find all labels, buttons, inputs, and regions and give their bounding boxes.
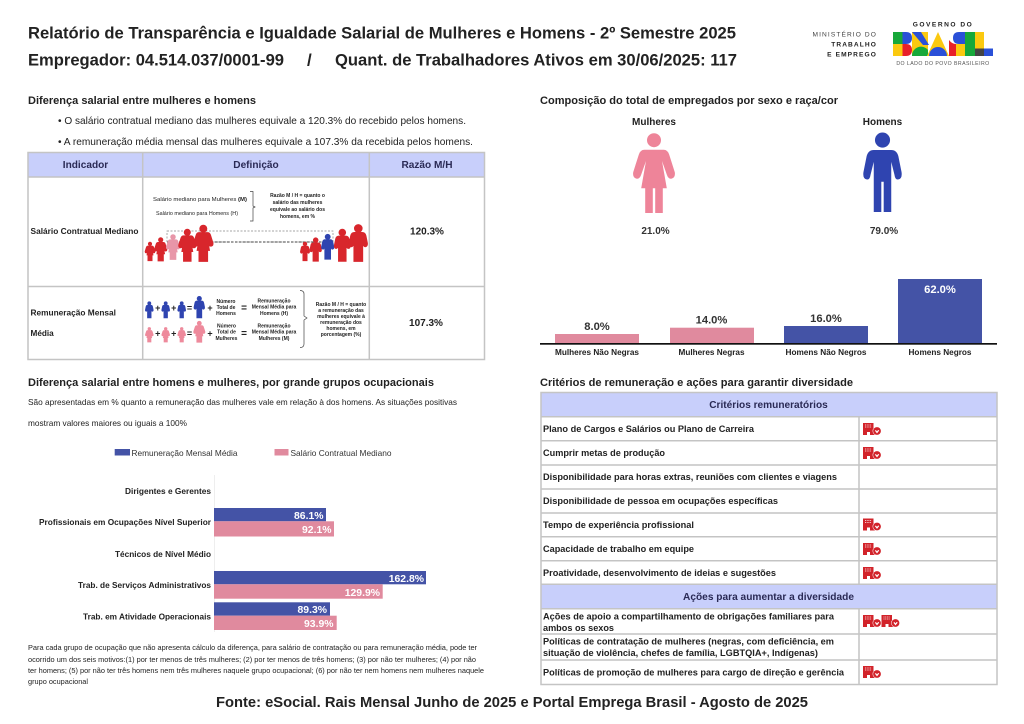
title line 2: separator: /	[307, 50, 312, 70]
diagram: mean remuneration definition: porcentagem (%)	[321, 332, 362, 338]
bar: Mulheres Não Negras	[555, 334, 639, 344]
diagram: mean remuneration definition: Remuneração	[257, 324, 291, 330]
action: promotion policies: Políticas de promoção de mulheres para cargo de direção e gerência	[543, 668, 845, 678]
diagram: mean remuneration definition: =	[241, 303, 247, 314]
diagram: mean remuneration definition: Homens (H)	[260, 311, 288, 317]
icon: company marker, experience	[863, 518, 881, 531]
criterion: overtime availability: Disponibilidade para horas extras, reuniões com clientes e viagens	[543, 472, 837, 482]
section header: Ações para aumentar a diversidade: Ações para aumentar a diversidade	[683, 592, 854, 603]
table: indicators	[28, 152, 484, 360]
bar chart: sex and race	[540, 279, 997, 357]
criterion: production goals: Cumprir metas de produção	[543, 448, 665, 458]
action: hiring policies	[543, 636, 834, 658]
value: 8.0%: 8.0%	[584, 321, 610, 333]
intro text: mostram valores maiores ou iguais a 100%	[28, 419, 187, 428]
category: Profissionais: Profissionais em Ocupações Nível Superior	[39, 517, 212, 527]
axis label: Homens Negros: Homens Negros	[908, 348, 972, 357]
icon: man	[863, 132, 902, 212]
panel: remuneration criteria and diversity actions	[540, 377, 997, 684]
diagram: mean remuneration definition: homens, em	[326, 326, 356, 332]
diagram: mean remuneration definition	[145, 290, 366, 348]
title: report heading	[28, 24, 737, 70]
diagram: mean remuneration definition: +	[207, 303, 213, 313]
icon: company marker, proactivity	[863, 567, 881, 579]
bars: Serviços Administrativos: 162.8%	[389, 574, 424, 585]
diagram: mean remuneration definition: Total de	[217, 305, 236, 311]
bar: Mulheres Negras	[670, 328, 754, 344]
logo: Governo do Brasil: GOVERNO DO	[913, 22, 973, 28]
diagram: median salary definition: equivale ao salário dos	[270, 207, 325, 213]
axis label: Mulheres Não Negras: Mulheres Não Negras	[555, 348, 639, 357]
diagram: mean remuneration definition: Razão M / H = quanto	[316, 302, 366, 308]
icon: company marker, shared duties 1	[863, 615, 881, 627]
footnote: Para cada grupo de ocupação que não apresenta cálculo da diferença, para salário de contratação ou para remuneração média, pode ter	[28, 643, 478, 652]
value: 14.0%: 14.0%	[696, 314, 727, 326]
column header: Razão M/H: Razão M/H	[401, 160, 453, 171]
criterion: experience: Tempo de experiência profissional	[543, 520, 694, 530]
action: shared family duties: Ações de apoio a compartilhamento de obrigações familiares para	[543, 612, 835, 622]
label: Mulheres: Mulheres	[632, 117, 676, 128]
legend: Salário Contratual Mediano	[290, 448, 392, 458]
diagram: mean remuneration definition: remuneração dos	[320, 320, 362, 326]
icon: company marker, promotion policies	[863, 666, 881, 678]
diagram: mean remuneration definition: Número	[217, 299, 235, 305]
title line 1: Relatório de Transparência e Igualdade Salarial de Mulheres e Homens - 2º Semestre 2025	[28, 24, 736, 42]
bullet: monthly remuneration: • A remuneração média mensal das mulheres equivale a 107.3% da recebida pelos homens.	[58, 137, 473, 148]
category: Técnicos: Técnicos de Nível Médio	[115, 549, 211, 559]
value: 62.0%: 62.0%	[924, 284, 956, 296]
footnote	[28, 643, 484, 686]
diagram: median salary definition: Razão M / H = quanto o	[270, 193, 325, 199]
diagram: mean remuneration definition: =	[241, 328, 247, 340]
bars: Profissionais: 86.1%	[294, 511, 324, 522]
icon: woman	[633, 133, 675, 213]
panel: workforce composition by sex and race	[540, 95, 997, 357]
diagram: mean remuneration definition: a remuneração das	[318, 308, 364, 314]
logo: Governo do Brasil	[893, 22, 993, 67]
diagram: mean remuneration definition: +	[207, 328, 213, 338]
bars: Atividade Operacionais: 93.9%	[304, 619, 334, 630]
icon: company marker, shared duties 2	[882, 615, 900, 627]
diagram: mean remuneration definition: Mulheres	[216, 336, 238, 342]
logo: Governo do Brasil: DO LADO DO POVO BRASILEIRO	[896, 61, 990, 67]
diagram: mean remuneration definition: =	[187, 303, 192, 313]
diagram: mean remuneration definition: +	[171, 328, 176, 338]
diagram: median salary definition: homens, em %	[280, 214, 316, 220]
logo: Ministério do Trabalho e Emprego: E EMPREGO	[827, 52, 877, 58]
value: women 21.0%: 21.0%	[641, 226, 670, 237]
diagram: median salary definition: Salário mediano para Mulheres (M)	[153, 197, 247, 203]
section header: Critérios remuneratórios: Critérios remuneratórios	[709, 400, 828, 411]
criterion: proactivity: Proatividade, desenvolvimento de ideias e sugestões	[543, 568, 776, 578]
title line 2: active workers: Quant. de Trabalhadores Ativos em 30/06/2025: 117	[335, 50, 737, 70]
value: 120.3%: 120.3%	[410, 226, 444, 238]
bar chart: occupational groups	[39, 475, 426, 632]
heading: Diferença salarial entre homens e mulheres, por grande grupos ocupacionais	[28, 377, 434, 389]
bar: Homens Negros	[898, 279, 982, 344]
action: shared family duties	[543, 612, 835, 633]
criterion: career plan: Plano de Cargos e Salários ou Plano de Carreira	[543, 424, 755, 434]
diagram: mean remuneration definition: Número	[217, 324, 236, 330]
footnote: grupo ocupacional	[28, 677, 88, 686]
logo: Ministério do Trabalho e Emprego: MINISTÉRIO DO	[812, 30, 877, 38]
column header: Indicador: Indicador	[63, 160, 108, 171]
heading: Composição do total de empregados por sexo e raça/cor	[540, 95, 839, 107]
legend: Remuneração Mensal Média	[132, 448, 238, 458]
icon: company marker, production goals	[863, 447, 881, 459]
diagram: mean remuneration definition: +	[155, 303, 160, 313]
category: Dirigentes e Gerentes: Dirigentes e Gerentes	[125, 486, 211, 496]
axis label: Mulheres Negras: Mulheres Negras	[678, 348, 745, 357]
intro text	[28, 398, 457, 428]
bars: Serviços Administrativos	[214, 571, 426, 599]
footnote: ocorrido um dos seis motivos:(1) por ter menos de três mulheres; (2) por ter menos de três homens; (3) por não ter mulheres; (4) por não	[28, 655, 476, 664]
action: hiring policies: Políticas de contratação de mulheres (negras, com deficiência, em	[543, 636, 834, 646]
value: men 79.0%: 79.0%	[870, 226, 898, 237]
title line 2: employer: Empregador: 04.514.037/0001-99	[28, 50, 284, 70]
criterion: specific occupations availability: Disponibilidade de pessoa em ocupações específicas	[543, 496, 778, 506]
diagram: mean remuneration definition: =	[187, 328, 192, 338]
panel: salary difference between women and men	[28, 95, 484, 360]
diagram: median salary definition	[145, 192, 367, 261]
axis label: Homens Não Negros: Homens Não Negros	[786, 348, 867, 357]
diagram: mean remuneration definition: Total de	[217, 330, 236, 336]
icon: company marker, teamwork	[863, 543, 881, 555]
diagram: mean remuneration definition: Homens	[216, 311, 236, 317]
panel: salary difference by occupational group	[28, 377, 484, 686]
bar: Homens Não Negros	[784, 326, 868, 344]
diagram: mean remuneration definition: +	[155, 328, 160, 338]
source footer: Fonte: eSocial. Rais Mensal Junho de 2025 e Portal Emprega Brasil - Agosto de 2025	[216, 694, 808, 711]
bars: Atividade Operacionais	[214, 602, 337, 630]
footnote: ter homens; (5) por não ter três homens nem três mulheres naquele grupo ocupacional; (6) por não ter nem homens nem mulheres naquele	[28, 666, 484, 675]
diagram: mean remuneration definition: mulheres equivale à	[317, 314, 365, 320]
heading: Diferença salarial entre mulheres e homens	[28, 95, 256, 107]
diagram: median salary definition: salário das mulheres	[273, 200, 323, 206]
diagram: mean remuneration definition: Mensal Média para	[252, 330, 296, 336]
diagram: mean remuneration definition: Mulheres (M)	[259, 336, 290, 342]
diagram: median salary definition: Salário mediano para Homens (H)	[156, 211, 238, 217]
bars: Atividade Operacionais: 89.3%	[298, 605, 327, 616]
diagram: mean remuneration definition: +	[171, 303, 176, 313]
legend	[115, 448, 392, 458]
heading: Critérios de remuneração e ações para garantir diversidade	[540, 377, 853, 389]
label: Homens: Homens	[863, 117, 903, 128]
category: Atividade Operacionais: Trab. em Atividade Operacionais	[83, 612, 211, 622]
diagram: mean remuneration definition: Mensal Média para	[252, 304, 296, 310]
category: Serviços Administrativos: Trab. de Serviços Administrativos	[78, 580, 211, 590]
row label: Salário Contratual Mediano: Salário Contratual Mediano	[30, 227, 139, 236]
logo: Ministério do Trabalho e Emprego	[812, 30, 877, 58]
bars: Profissionais: 92.1%	[302, 525, 332, 536]
value: 107.3%: 107.3%	[409, 318, 443, 329]
row label: Remuneração Mensal Média	[30, 308, 116, 338]
icon: company marker, career plan	[863, 423, 881, 435]
row label: Remuneração Mensal Média: Remuneração Mensal	[30, 308, 116, 318]
value: 16.0%: 16.0%	[810, 313, 842, 325]
bars: Serviços Administrativos: 129.9%	[345, 588, 380, 599]
action: hiring policies: situação de violência, chefes de família, LGBTQIA+, Indígenas)	[543, 648, 818, 658]
table: criteria and actions	[541, 392, 997, 684]
row label: Remuneração Mensal Média: Média	[30, 329, 54, 338]
bars: Profissionais	[214, 508, 334, 536]
intro text: São apresentadas em % quanto a remuneração das mulheres vale em relação à dos homens. As situações positivas	[28, 398, 457, 407]
diagram: mean remuneration definition: Remuneração	[257, 298, 291, 304]
axis line	[540, 343, 997, 345]
bullet: contractual salary: • O salário contratual mediano das mulheres equivale a 120.3% do recebido pelos homens.	[58, 116, 466, 127]
logo: Ministério do Trabalho e Emprego: TRABALHO	[831, 42, 877, 48]
criterion: teamwork: Capacidade de trabalho em equipe	[543, 544, 694, 554]
action: shared family duties: ambos os sexos	[543, 623, 614, 633]
column header: Definição: Definição	[233, 160, 279, 171]
